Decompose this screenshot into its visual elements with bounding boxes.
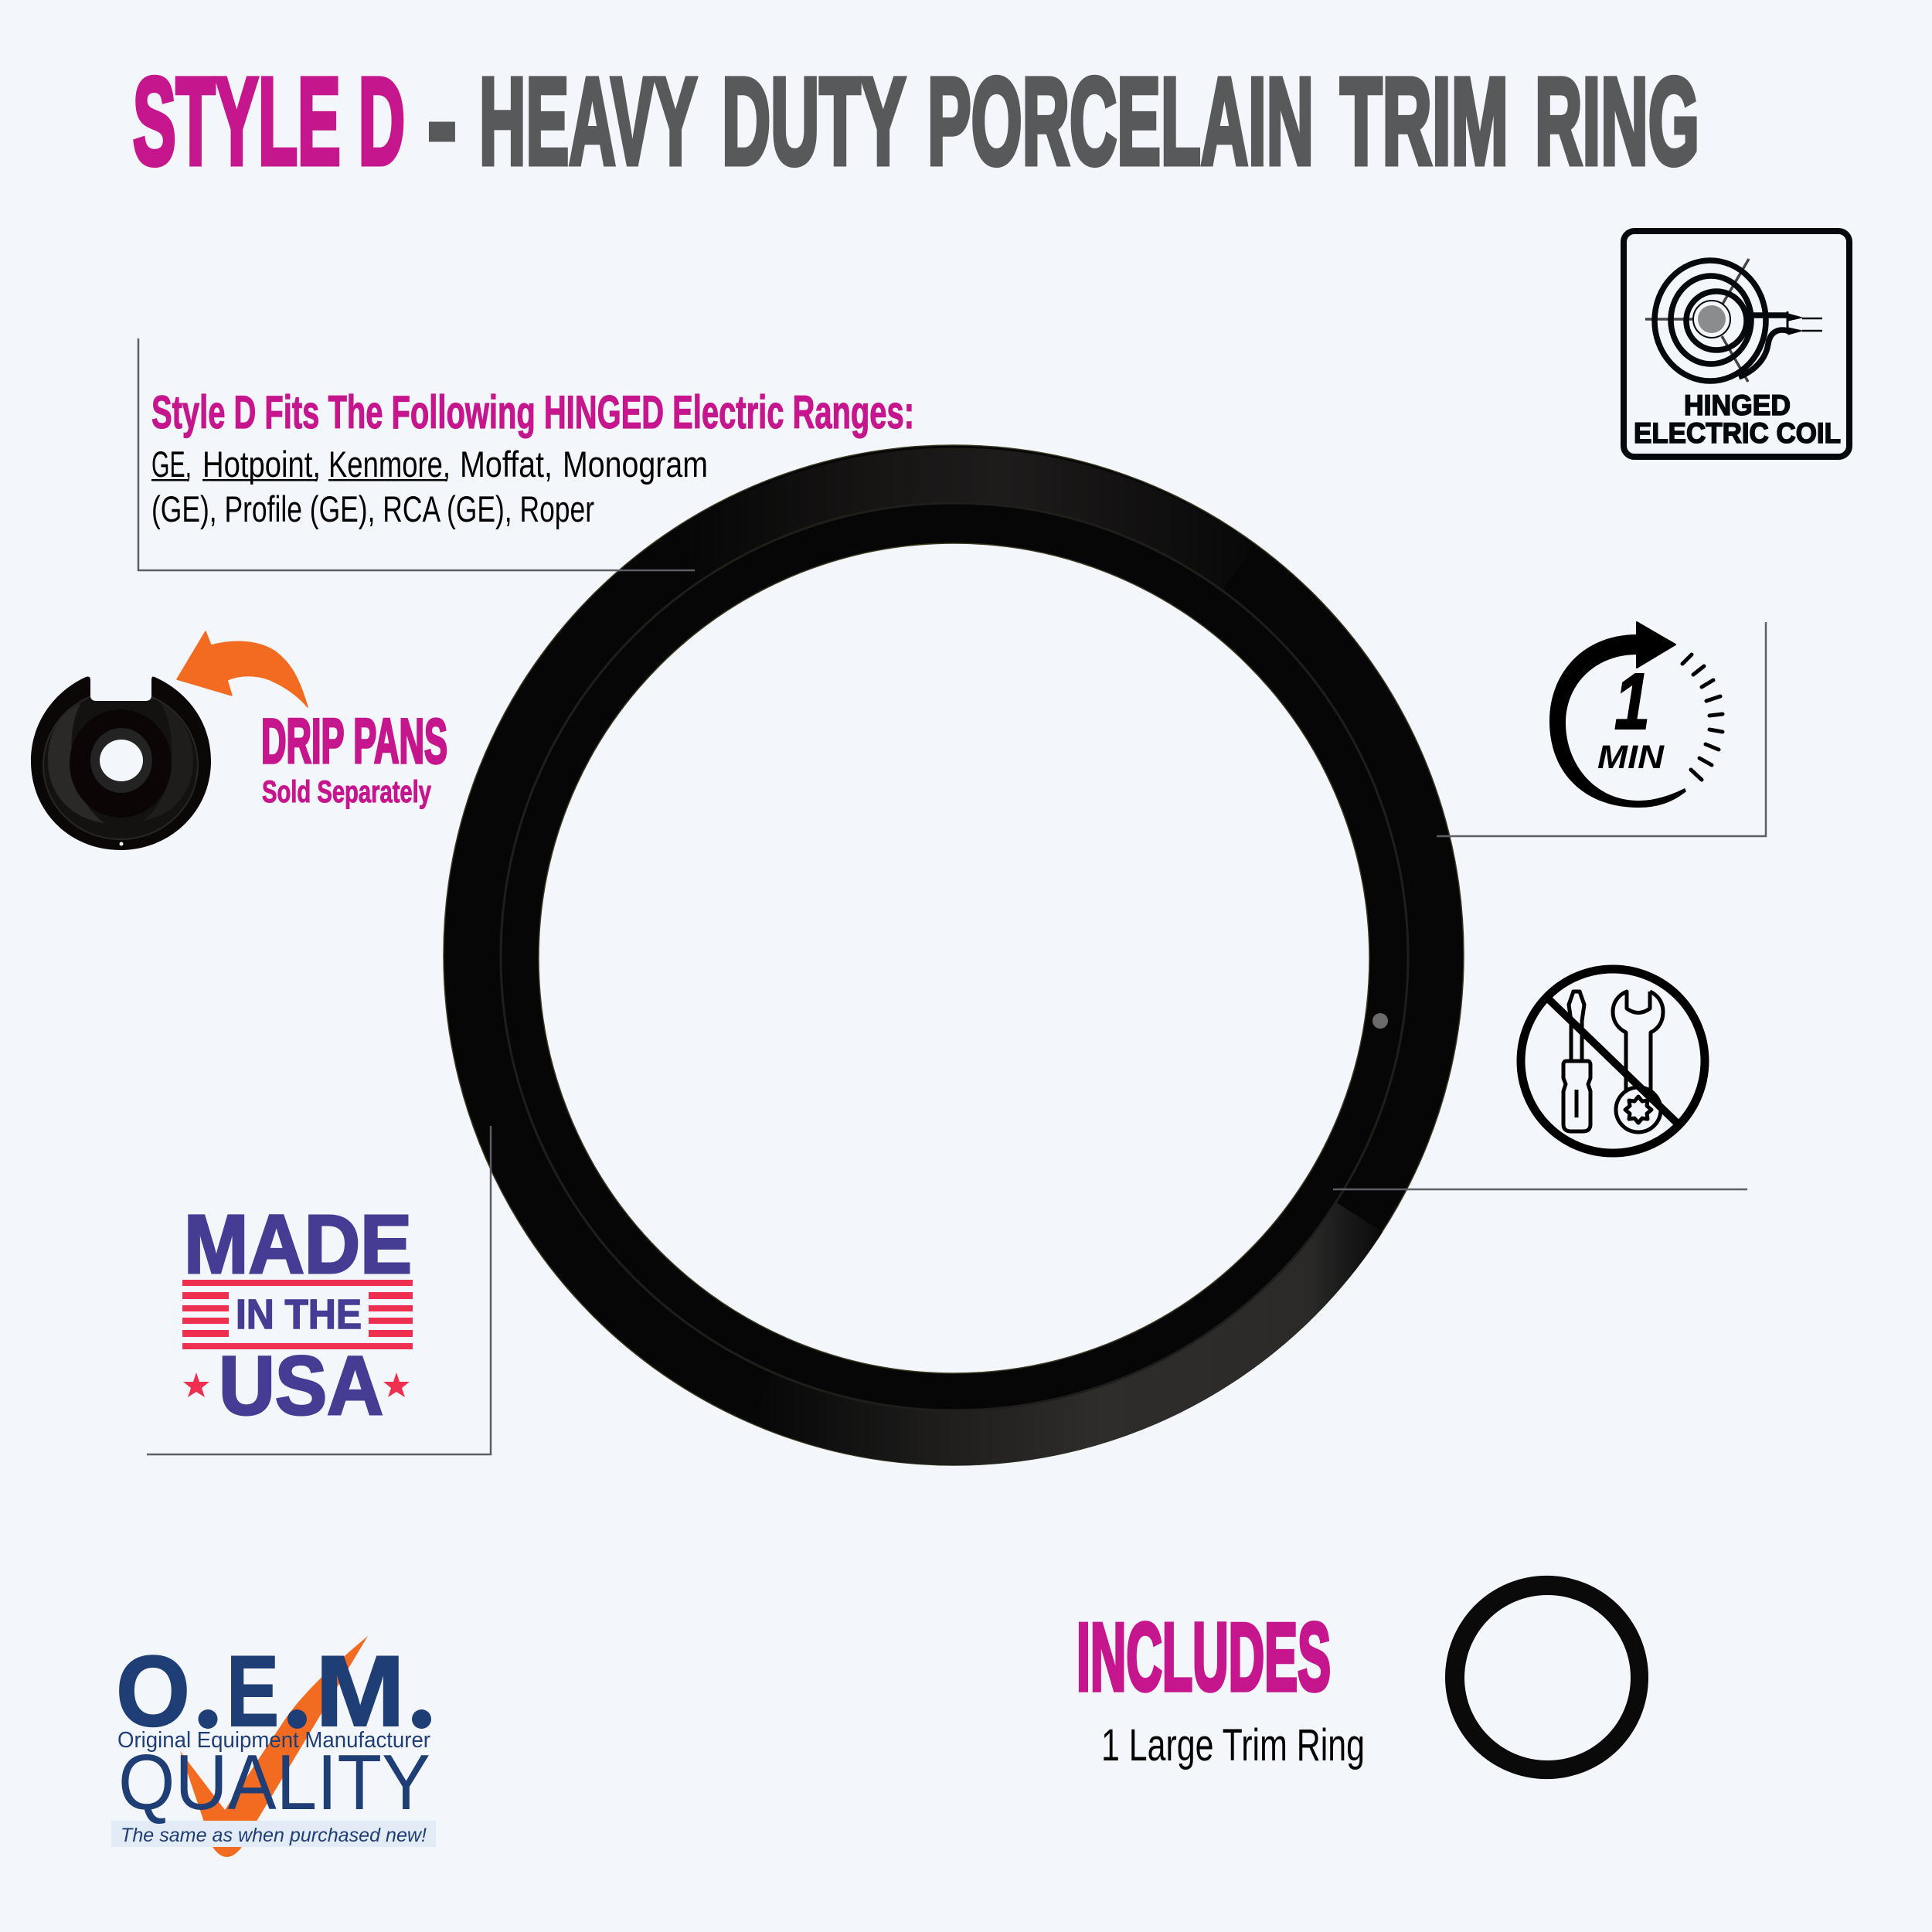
O.E.M. wordmark: . <box>287 1662 306 1739</box>
wrench <box>1613 992 1663 1132</box>
brand list line two: (GE), Profile (GE), RCA (GE), Roper <box>151 488 594 529</box>
O.E.M. wordmark: M <box>315 1634 405 1747</box>
badge label: HINGED <box>1684 389 1791 421</box>
drip pan left sheen <box>48 703 104 823</box>
leader line: compatible ranges <box>138 338 695 570</box>
ring tab dot <box>1372 1013 1388 1029</box>
IN THE wordmark: IN THE <box>236 1291 362 1338</box>
drip pan hub <box>90 728 152 793</box>
ring lower right sheen <box>751 1202 1383 1465</box>
title: DUTY <box>722 52 906 190</box>
badge label: ELECTRIC COIL <box>1634 417 1841 449</box>
title: STYLE D <box>133 52 405 190</box>
small trim ring photo <box>1445 1576 1648 1779</box>
USA wordmark: USA <box>219 1338 383 1432</box>
drip pan rim dot <box>119 842 124 845</box>
drip pan right sheen <box>143 703 193 821</box>
icon: one minute timer <box>1549 622 1723 808</box>
drip pan notch <box>90 666 151 701</box>
title: PORCELAIN <box>927 52 1314 190</box>
drip pan surface <box>43 691 198 839</box>
orange check mark <box>180 1636 368 1857</box>
title: TRIM <box>1340 52 1509 190</box>
ring top sheen <box>672 447 1254 590</box>
coil rings <box>1655 260 1788 381</box>
brand list line one: Moffat, <box>460 444 553 485</box>
icon: hinged electric coil badge <box>1624 231 1849 457</box>
tagline band <box>111 1821 436 1847</box>
O.E.M. wordmark: E <box>226 1634 279 1747</box>
drip pan hole <box>100 740 143 781</box>
brand list line one <box>151 444 708 485</box>
stars <box>183 1372 410 1397</box>
coil terminals <box>1787 311 1822 335</box>
timer label: 1 <box>1614 657 1650 746</box>
large trim ring product photo <box>444 445 1464 1465</box>
badge label <box>1634 389 1841 449</box>
screwdriver <box>1563 992 1590 1131</box>
O.E.M. wordmark: . <box>198 1662 217 1739</box>
O.E.M. wordmark: O <box>116 1634 190 1747</box>
O.E.M. wordmark <box>116 1634 431 1747</box>
leader line: no tools <box>1333 1189 1747 1190</box>
OEM quality logo <box>111 1634 436 1857</box>
icon: no tools required <box>1521 969 1705 1153</box>
made in the USA badge <box>182 1197 413 1432</box>
drip pans label: Sold Separately <box>262 775 432 809</box>
drip pans label: DRIP PANS <box>261 706 447 777</box>
title: HEAVY <box>479 52 697 190</box>
timer ticks <box>1682 655 1723 780</box>
original equipment manufacturer line: Original Equipment Manufacturer <box>117 1728 430 1753</box>
icon: drip pan photo <box>31 666 211 850</box>
MADE wordmark: MADE <box>184 1197 412 1291</box>
coil spokes <box>1645 259 1749 382</box>
includes heading: INCLUDES <box>1077 1604 1331 1711</box>
compatibility text block <box>151 386 914 529</box>
brand list line one: Kenmore, <box>328 444 451 485</box>
title: - <box>427 52 457 190</box>
leader line: made in the USA <box>147 1126 491 1454</box>
icon: one minute timer: MIN <box>1597 739 1665 776</box>
leader line: one minute install <box>1437 622 1766 836</box>
O.E.M. wordmark: . <box>411 1662 430 1739</box>
brand list line one: Monogram <box>563 444 708 485</box>
title <box>133 52 1699 190</box>
prohibition sign <box>1521 969 1705 1153</box>
includes description: 1 Large Trim Ring <box>1101 1720 1365 1770</box>
drip pans label <box>261 706 447 809</box>
coil centre disc <box>1693 301 1730 338</box>
flag stripes <box>182 1280 413 1349</box>
timer arrow <box>1549 634 1686 808</box>
drip pan bowl <box>70 709 172 818</box>
brand list line one: GE, <box>151 444 192 485</box>
QUALITY wordmark: QUALITY <box>118 1740 430 1826</box>
tagline: The same as when purchased new! <box>121 1825 427 1846</box>
compatibility heading: Style D Fits The Following HINGED Electric Ranges: <box>151 386 914 438</box>
brand list line one: Hotpoint, <box>202 444 321 485</box>
title: RING <box>1535 52 1699 190</box>
arrow: orange curved arrow to drip pan <box>177 631 308 707</box>
ring groove highlight <box>501 503 1408 1410</box>
